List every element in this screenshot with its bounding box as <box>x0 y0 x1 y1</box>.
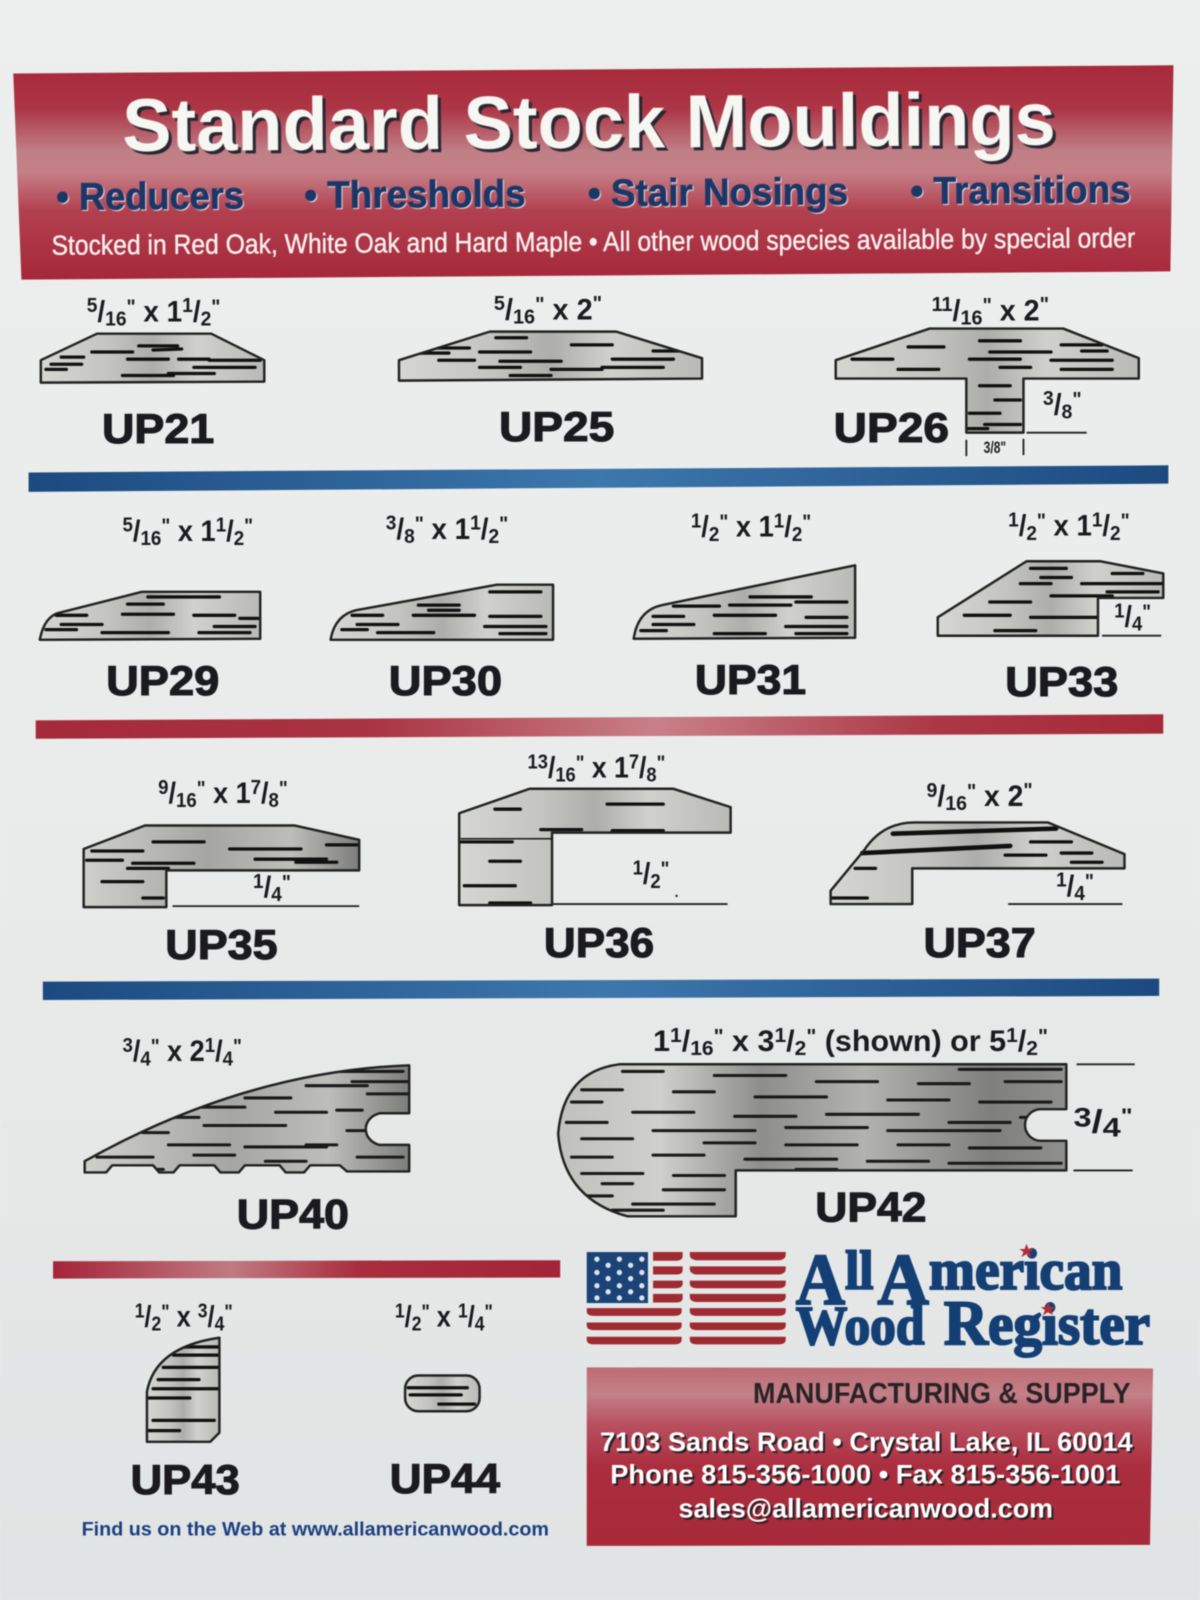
dimension: stem height: 3 <box>1043 388 1054 410</box>
logo wordmark: merican <box>929 1239 1122 1302</box>
dimension: UP42: 16 <box>690 1038 714 1060</box>
profile: UP30 <box>331 585 553 640</box>
moulding: UP36 <box>459 751 731 966</box>
dimension: UP30: 8 <box>404 526 415 548</box>
logo wordmark <box>796 1239 1150 1358</box>
dimension: UP29: x 1 <box>170 515 216 548</box>
dimension: UP42: " <box>714 1026 724 1048</box>
dimension: UP42: 1 <box>653 1025 670 1058</box>
dimension: UP26: / <box>953 294 960 327</box>
dimension: UP40: x 2 <box>160 1035 205 1068</box>
moulding: UP44 <box>390 1300 501 1502</box>
dimension: UP31: 2 <box>792 524 802 546</box>
dimension: UP43: 1 <box>135 1300 144 1322</box>
dimension: UP31: / <box>784 511 792 544</box>
dimension: UP42 tongue height: / <box>1092 1103 1103 1140</box>
logo wordmark: A <box>796 1239 849 1320</box>
dimension: UP42 tongue height: 3 <box>1073 1103 1092 1133</box>
profile: UP42 <box>558 1064 1066 1216</box>
dimension: UP21: 16 <box>105 309 127 331</box>
profile: UP25 <box>399 332 702 381</box>
dimension: UP26: " <box>982 295 992 317</box>
dimension: UP36: 13 <box>528 751 548 773</box>
dimension: UP26: " <box>1040 294 1049 316</box>
dimension: stem width: 3/8" <box>984 439 1006 457</box>
dimension: UP29: 1 <box>216 515 226 537</box>
dimension: UP35 rabbet: " <box>282 872 291 894</box>
dimension: UP36: 16 <box>555 765 576 787</box>
profile: UP36 <box>459 789 731 905</box>
dimension: UP37 rabbet: / <box>1067 870 1074 903</box>
dimension: UP35 rabbet <box>172 871 359 906</box>
dimension: UP42: / <box>786 1025 795 1058</box>
dimension: UP31: 2 <box>709 524 719 546</box>
dimension: UP37: x 2 <box>976 780 1023 813</box>
dimension: UP36: 7 <box>629 751 639 773</box>
dimension: UP42: 1 <box>1006 1025 1018 1047</box>
dimension: UP42: 1 <box>774 1025 786 1047</box>
dimension: UP42 tongue height: " <box>1121 1105 1133 1127</box>
label: UP44: UP44 <box>390 1455 501 1502</box>
dimension: UP44: 2 <box>412 1314 421 1336</box>
profile: UP21 <box>41 334 264 383</box>
dimension: UP43: " <box>224 1301 233 1323</box>
dimension: UP31: 1 <box>691 511 701 533</box>
moulding: UP40 <box>85 1035 409 1238</box>
dimension: UP30: / <box>481 513 488 546</box>
dimension: UP42: 1 <box>670 1025 682 1047</box>
dimension: UP21: 2 <box>201 309 211 331</box>
dimension: UP40: " <box>233 1036 242 1058</box>
dimension: UP21: " <box>211 296 220 318</box>
dimension: UP40: / <box>215 1035 223 1068</box>
dimension: UP26: 16 <box>960 307 982 329</box>
dimension: UP31: " <box>719 512 728 534</box>
dimension: UP37 rabbet: 4 <box>1074 883 1085 905</box>
dimension: UP25: 5 <box>494 293 505 315</box>
dimension: UP42: x 3 <box>724 1025 774 1058</box>
dimension: UP40: 4 <box>223 1048 234 1070</box>
dimension: UP36: / <box>548 752 555 785</box>
dimension: UP33: 2 <box>1026 523 1037 545</box>
dimension: UP43: x <box>170 1301 198 1334</box>
dimension: UP29: 16 <box>140 528 161 550</box>
dimension: UP29: 2 <box>234 528 244 550</box>
dimension: UP37 rabbet <box>1008 870 1122 905</box>
dimension: UP36: 8 <box>646 765 657 787</box>
dimension: UP35: 16 <box>176 790 197 812</box>
dimension: stem height <box>1027 388 1087 433</box>
dimension: UP21: x 1 <box>136 295 182 328</box>
dimension: stem width <box>966 439 1023 457</box>
dimension: UP37 rabbet: 1 <box>1056 870 1067 892</box>
dimension: UP44: 1 <box>395 1300 405 1322</box>
dimension: UP42 tongue height <box>1073 1064 1135 1170</box>
dimension: UP35 rabbet: 4 <box>271 884 282 906</box>
moulding: UP25 <box>399 293 702 450</box>
dimension: UP37: 9 <box>927 780 937 802</box>
dimension: UP42: " <box>1038 1026 1048 1048</box>
dimension: UP44: / <box>405 1301 412 1334</box>
dimension: UP33: " <box>1121 511 1130 533</box>
dimension: UP30: x 1 <box>424 513 470 546</box>
dimension: UP36 rabbet: " <box>661 859 669 881</box>
dimension: UP33: 1 <box>1092 510 1102 532</box>
divider: red short <box>53 1260 560 1279</box>
title: Standard Stock Mouldings <box>122 78 1056 168</box>
dimension: UP43: 2 <box>151 1314 161 1336</box>
dimension: UP37: " <box>1023 780 1033 802</box>
dimension: UP35: / <box>169 777 176 810</box>
divider: blue <box>29 465 1168 492</box>
dimension: UP43: / <box>144 1301 151 1334</box>
label: UP35: UP35 <box>165 921 278 968</box>
dimension: UP29: 5 <box>122 515 133 537</box>
dimension: UP40: 1 <box>205 1035 215 1057</box>
dimension: UP42: " <box>806 1026 816 1048</box>
dimension: UP40: " <box>151 1036 160 1058</box>
label: UP29: UP29 <box>106 657 219 704</box>
profile: UP43 <box>147 1338 219 1442</box>
label: UP33: UP33 <box>1005 658 1118 705</box>
dimension: UP30: / <box>396 513 404 546</box>
profile: UP31 <box>634 565 855 639</box>
dimension: UP44: " <box>421 1301 430 1323</box>
dimension: UP30: 2 <box>488 526 499 548</box>
dimension: UP42: / <box>682 1025 690 1058</box>
dimension: UP33: 2 <box>1110 523 1121 545</box>
profile: UP29 <box>40 592 260 640</box>
profile: UP37 <box>831 822 1124 904</box>
moulding: UP33 <box>938 510 1163 705</box>
dimension: UP25: " <box>535 294 545 316</box>
divider: blue <box>43 979 1159 1000</box>
dimension: UP35 rabbet: 1 <box>253 871 264 893</box>
label: UP40: UP40 <box>237 1191 349 1238</box>
dimension: UP26: x 2 <box>992 294 1040 327</box>
label: UP21: UP21 <box>102 405 214 452</box>
moulding: UP35 <box>84 777 359 968</box>
dimension: UP33: " <box>1037 511 1046 533</box>
dimension: UP29: / <box>133 515 140 548</box>
dimension: stem height: " <box>1072 389 1082 411</box>
dimension: UP36: / <box>639 752 646 785</box>
dimension: UP36: " <box>657 752 665 774</box>
moulding: UP43 <box>131 1300 240 1503</box>
dimension: UP42: 2 <box>795 1038 806 1060</box>
dimension: UP40: 3 <box>122 1035 133 1057</box>
dimension: UP44: 4 <box>475 1314 485 1336</box>
dimension: UP31: 1 <box>774 511 784 533</box>
dimension: UP42: (shown) or 5 <box>816 1025 1006 1058</box>
category: thresholds: • Thresholds <box>304 173 526 216</box>
dimension: UP43: 4 <box>215 1314 225 1336</box>
dimension: UP35 rabbet: / <box>264 871 271 904</box>
dimension: UP33 rabbet <box>1102 600 1161 636</box>
moulding: UP30 <box>331 513 553 704</box>
category: transitions: • Transitions <box>910 168 1131 212</box>
dimension: UP21: / <box>97 295 105 328</box>
dimension: UP42: 2 <box>1026 1038 1038 1060</box>
dimension: UP43: / <box>208 1301 215 1334</box>
dimension: UP37 rabbet: " <box>1085 871 1094 893</box>
category: reducers: • Reducers <box>56 175 244 218</box>
dimension: stem height: 8 <box>1062 401 1072 423</box>
label: UP31: UP31 <box>695 656 806 703</box>
dimension: UP33 rabbet: " <box>1142 601 1151 623</box>
dimension: UP33: 1 <box>1008 510 1019 532</box>
category: stair nosings: • Stair Nosings <box>588 170 848 214</box>
dimension: UP25: x 2 <box>545 293 593 326</box>
logo wordmark: A <box>878 1239 931 1320</box>
dimension: UP40: / <box>133 1035 140 1068</box>
dimension: UP35: 9 <box>158 777 169 799</box>
phone and fax: Phone 815-356-1000 • Fax 815-356-1001 <box>610 1460 1121 1490</box>
dimension: UP36 rabbet: 2 <box>650 871 661 893</box>
logo wordmark: Wood <box>796 1295 925 1356</box>
icon: american flag <box>587 1252 786 1344</box>
dimension: UP40: 4 <box>140 1048 151 1070</box>
street address: 7103 Sands Road • Crystal Lake, IL 60014 <box>600 1427 1133 1457</box>
dimension: UP31: x 1 <box>728 511 774 544</box>
label: UP43: UP43 <box>131 1456 240 1503</box>
dimension: UP25: 16 <box>513 306 535 328</box>
dimension: UP33 rabbet: 1 <box>1114 600 1125 622</box>
dimension: UP36: x 1 <box>584 752 629 785</box>
moulding: UP21 <box>41 295 264 452</box>
dimension: UP21: " <box>127 296 136 318</box>
dimension: UP43: 3 <box>198 1300 208 1322</box>
dimension: UP43: " <box>161 1301 170 1323</box>
dimension: UP25: " <box>593 293 602 315</box>
dimension: UP35: " <box>197 778 206 800</box>
dimension: UP44: / <box>468 1301 475 1334</box>
profile: UP40 <box>85 1065 409 1172</box>
dimension: stem height: / <box>1054 388 1062 421</box>
dimension: UP30: " <box>415 514 424 536</box>
dimension: UP35: 7 <box>251 777 261 799</box>
logo wordmark: ll <box>845 1240 873 1301</box>
dimension: UP36 rabbet: / <box>643 858 650 891</box>
logo wordmark: Register <box>944 1288 1150 1358</box>
dimension: UP37: " <box>967 781 976 803</box>
moulding: UP37 <box>831 780 1124 966</box>
dimension: UP44: x <box>430 1301 458 1334</box>
profile: UP26 <box>836 329 1139 433</box>
label: UP36: UP36 <box>544 919 654 966</box>
dimension: UP29: " <box>161 516 170 538</box>
dimension: UP25: / <box>505 293 513 326</box>
web address: Find us on the Web at www.allamericanwood.com <box>82 1519 549 1541</box>
label: UP37: UP37 <box>923 919 1036 966</box>
dimension: UP33: / <box>1019 510 1026 543</box>
profile: UP44 <box>405 1376 480 1411</box>
dimension: UP36: " <box>576 752 584 774</box>
dimension: UP35: x 1 <box>206 777 251 810</box>
dimension: UP30: " <box>499 514 508 536</box>
dimension: UP42 tongue height: 4 <box>1103 1113 1121 1143</box>
label: UP26: UP26 <box>834 404 949 451</box>
dimension: UP37: / <box>937 780 945 813</box>
dimension: UP30: 1 <box>470 513 481 535</box>
profile: UP35 <box>84 826 359 907</box>
dimension: UP44: " <box>485 1301 493 1323</box>
profile: UP33 <box>938 561 1163 636</box>
moulding: UP26 <box>834 294 1139 457</box>
dimension: UP21: / <box>193 295 201 328</box>
moulding: UP29 <box>40 515 260 704</box>
dimension: UP33: x 1 <box>1046 510 1092 543</box>
address panel <box>587 1367 1153 1546</box>
dimension: UP44: 1 <box>458 1300 468 1322</box>
dimension: UP21: 1 <box>182 295 193 317</box>
dimension: UP35: / <box>261 777 269 810</box>
dimension: UP33 rabbet: 4 <box>1132 614 1143 636</box>
divider: red <box>36 714 1163 739</box>
dimension: UP35: 8 <box>269 790 279 812</box>
dimension: UP26: 11 <box>932 294 953 316</box>
moulding: UP42 <box>558 1025 1135 1230</box>
dimension: UP36 rabbet: 1 <box>633 857 643 879</box>
dimension: UP29: " <box>244 516 253 538</box>
moulding: UP31 <box>634 511 855 703</box>
dimension: UP31: " <box>802 512 811 534</box>
dimension: UP33: / <box>1102 510 1110 543</box>
dimension: UP33 rabbet: / <box>1125 601 1132 634</box>
header banner <box>13 65 1173 280</box>
panel heading: MANUFACTURING & SUPPLY <box>753 1378 1131 1410</box>
dimension: UP42: / <box>1018 1025 1026 1058</box>
label: UP30: UP30 <box>389 657 502 704</box>
dimension: UP37: 16 <box>945 793 967 815</box>
email: sales@allamericanwood.com <box>679 1493 1053 1523</box>
label: UP25: UP25 <box>499 403 614 450</box>
dimension: UP36 rabbet <box>552 857 728 904</box>
dimension: UP21: 5 <box>87 295 97 317</box>
dimension: UP30: 3 <box>386 513 396 535</box>
dimension: UP31: / <box>701 511 709 544</box>
dimension: UP29: / <box>226 515 234 548</box>
label: UP42: UP42 <box>815 1183 927 1230</box>
dimension: UP35: " <box>279 778 288 800</box>
